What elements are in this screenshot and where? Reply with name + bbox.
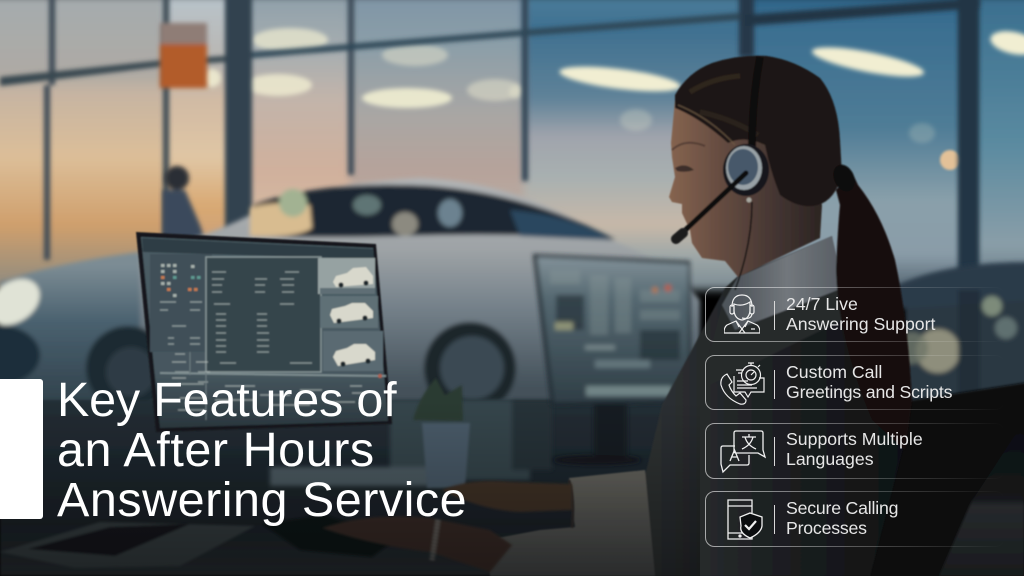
far side of desk bbox=[270, 400, 552, 486]
agent: torso bbox=[487, 56, 912, 576]
status dots bbox=[161, 264, 194, 297]
text: Custom Call bbox=[786, 362, 882, 382]
title: Key Features of bbox=[57, 373, 396, 427]
background car and bokeh at right bbox=[880, 262, 1024, 405]
feature card: multiple languages bbox=[705, 423, 986, 479]
main monitor with dashboard bbox=[136, 232, 392, 432]
text bbox=[786, 429, 923, 469]
text: Processes bbox=[786, 518, 867, 538]
icon: phone with stopwatch and message bbox=[720, 362, 765, 405]
chair bbox=[760, 382, 1024, 576]
window frames bbox=[0, 0, 980, 295]
glass pot with plant bbox=[413, 378, 470, 488]
second monitor bbox=[533, 254, 692, 465]
text: Answering Support bbox=[786, 314, 935, 334]
hair tie bbox=[829, 161, 859, 195]
windows: dusk sky bbox=[0, 0, 1024, 290]
feature card: custom call greetings and scripts bbox=[705, 355, 986, 410]
text bbox=[786, 362, 952, 402]
blurred white car bbox=[0, 178, 700, 415]
text bbox=[786, 294, 936, 334]
collar bbox=[722, 236, 838, 330]
divider bbox=[774, 437, 775, 466]
white accent block bbox=[0, 379, 43, 519]
feature card: secure calling processes bbox=[705, 491, 984, 547]
warm bokeh light bbox=[940, 150, 960, 170]
title: Answering Service bbox=[57, 473, 467, 527]
sign bbox=[160, 23, 207, 88]
title: an After Hours bbox=[57, 423, 375, 477]
ponytail bbox=[836, 172, 912, 450]
vehicle thumbnails bbox=[330, 267, 375, 366]
desk surface bbox=[0, 400, 1024, 576]
divider bbox=[774, 301, 775, 330]
text: Secure Calling bbox=[786, 498, 898, 518]
title bbox=[57, 373, 467, 527]
text: Languages bbox=[786, 449, 874, 469]
laptop and keyboard bbox=[0, 515, 395, 568]
blurred distant person bbox=[163, 166, 205, 240]
hair bbox=[675, 56, 842, 206]
divider bbox=[774, 370, 775, 399]
headset bbox=[752, 57, 760, 148]
dashboard rows bbox=[160, 272, 364, 410]
soft dim over lower left bbox=[0, 400, 700, 576]
sleeve and cuff bbox=[487, 470, 655, 576]
icon: agent with headset bbox=[724, 294, 760, 334]
feature card: 24/7 live answering support bbox=[705, 287, 983, 342]
text: Supports Multiple bbox=[786, 429, 923, 449]
icon: translation speech bubbles bbox=[720, 430, 766, 474]
ceiling lights bbox=[203, 27, 1024, 143]
divider bbox=[774, 505, 775, 534]
neck and face bbox=[669, 100, 822, 277]
agent hands on keyboard bbox=[322, 481, 572, 572]
text bbox=[786, 498, 898, 538]
text: Greetings and Scripts bbox=[786, 382, 952, 402]
icon: phone with security shield bbox=[727, 499, 763, 540]
text: 24/7 Live bbox=[786, 294, 858, 314]
